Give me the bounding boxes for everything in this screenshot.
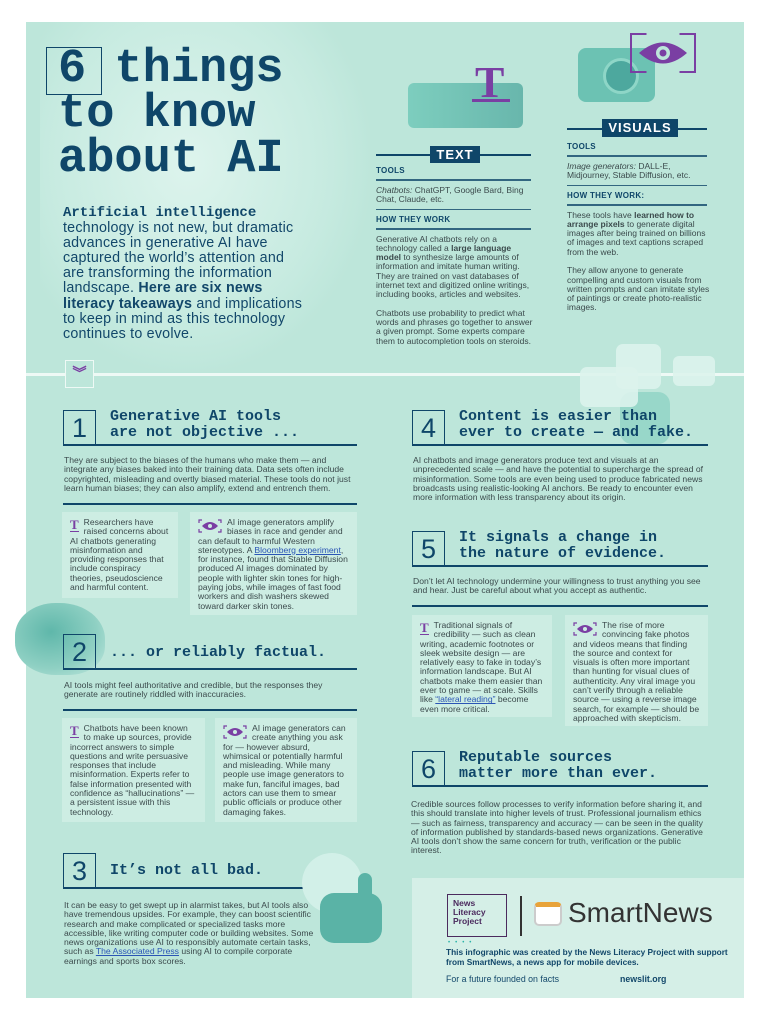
- panel: text tools: Chatbots use probability to predict what words and phrases go together to answer a given prompt. Some experts compare them to autocompletion tools on steroids.: [376, 308, 532, 346]
- section 2: ... or reliably factual.: [110, 644, 326, 661]
- panel: text tools: T: [475, 58, 504, 107]
- section 4: [412, 408, 708, 502]
- decorative head silhouette: [40, 22, 370, 372]
- footer: credits: ••••: [448, 940, 476, 946]
- logo: News Literacy Project: [447, 894, 507, 937]
- section 4: AI chatbots and image generators produce text and visuals at an unprecedented scale — and have the potential to supercharge the spread of misinformation. Some tools are even being used to produce fabricated news broadcasts using realistic-looking AI anchors. Be ready to encounter even more information with less transparency about its origin.: [413, 455, 703, 502]
- section 6: 6: [421, 754, 436, 784]
- section 4: Content is easier than: [459, 408, 657, 425]
- panel: visual tools: VISUALS: [608, 120, 672, 135]
- panel: text tools: TEXT: [436, 147, 474, 162]
- section 5: the nature of evidence.: [459, 545, 666, 562]
- label: TEXT: [376, 154, 531, 156]
- section 4: ever to create — and fake.: [459, 424, 693, 441]
- panel: visual tools: They allow anyone to generate compelling and custom visuals from written prompts and can imitate styles of paintings or create photo-realistic images.: [567, 265, 709, 312]
- intro text: Artificial intelligence technology is not new, but dramatic advances in generative AI have captured the world’s attention and are transforming the information landscape. Here are six news literacy takeaways and implications to keep in mind as this technology continues to evolve.: [63, 205, 302, 342]
- section 2: AI tools might feel authoritative and credible, but the responses they generate are routinely riddled with inaccuracies.: [64, 680, 322, 699]
- section 2: [62, 634, 357, 822]
- callout: credibility signals: T: [420, 620, 429, 635]
- section 5: [412, 529, 708, 726]
- footer: credits: SmartNews: [568, 897, 713, 928]
- title: to know: [58, 88, 255, 141]
- section 6: matter more than ever.: [459, 765, 657, 782]
- icon: chat bubbles and robot: [580, 344, 715, 444]
- callout: fakes: AI image generators can create anything you ask for — however absurd, whimsical or potentially harmful and misleading. While many people use image generators to make fun, fanciful images, bad actors can use them to smear public officials or produce other damaging fakes.: [223, 723, 346, 817]
- title: about AI: [58, 133, 284, 186]
- panel: text tools: TOOLS: [376, 166, 405, 175]
- title: 6 things: [58, 43, 284, 96]
- section 3: [63, 853, 313, 966]
- footer: credits: This infographic was created by the News Literacy Project with support from SmartNews, a news app for mobile devices.: [446, 947, 728, 966]
- section 5: It signals a change in: [459, 529, 657, 546]
- icon: thumbs up with smiley: [302, 853, 382, 943]
- footer: credits: For a future founded on facts: [446, 974, 559, 984]
- section 1: Generative AI tools: [110, 408, 281, 425]
- section 3: 3: [72, 856, 87, 886]
- divider between intro and sections: [26, 373, 744, 376]
- section 1: [62, 408, 357, 615]
- section 5: 5: [421, 534, 436, 564]
- section 6: Credible sources follow processes to verify information before sharing it, and this should translate into higher levels of trust. Professional journalism ethics — such as fairness, transparency and accuracy — can be seen in the quality of information published by standards-based news organizations. Generative AI tools don’t show the same concern for truth, verification or the public interest.: [411, 799, 703, 855]
- logo: News Literacy Project: Literacy: [453, 907, 486, 917]
- callout: credibility signals: Traditional signals of credibility — such as clean writing, academic footnotes or sleek website design — are relatively easy to fake in today’s information landscape. But AI chatbots make them easier than ever to game — at scale. Skills like “lateral reading” become even more critical.: [420, 620, 542, 714]
- panel: text tools: Generative AI chatbots rely on a technology called a large language model to synthesize large amounts of information and imitate human writing. They are trained on vast databases of internet text and digitized online writings, including books, articles and websites.: [376, 234, 529, 299]
- icon: scroll chevron: ︾: [72, 365, 86, 381]
- icon: brain: [15, 603, 105, 675]
- section 3: It can be easy to get swept up in alarmist takes, but AI tools also have tremendous upsides. For example, they can boost scientific research and make complicated or specialized tasks more accessible, like writing computer code or building websites. Some news organizations use AI to responsibly automate certain tasks, such as The Associated Press using AI to compile corporate earnings and sports box scores.: [64, 900, 313, 966]
- panel: visual tools: These tools have learned how to arrange pixels to generate digital images after being trained on billions of images and text captions scraped from the web.: [567, 210, 705, 257]
- callout: image bias: AI image generators amplify biases in race and gender and can default to harmful Western stereotypes. A Bloomberg experiment, for instance, found that Stable Diffusion produced AI images dominated by people with lighter skin tones for high-paying jobs, while images of fast food workers and dish washers skewed toward darker skin tones.: [198, 517, 348, 611]
- section 3: It’s not all bad.: [110, 862, 263, 879]
- logo: SmartNews: [534, 902, 562, 926]
- section 4: 4: [421, 413, 436, 443]
- footer: credits: newslit.org: [620, 974, 666, 984]
- label: VISUALS: [567, 128, 707, 130]
- icon: camera with eye: [578, 48, 655, 102]
- logo: News Literacy Project: Project: [453, 916, 482, 926]
- logo: News Literacy Project: News: [453, 898, 475, 908]
- title: [46, 43, 284, 186]
- callout: text bias: Researchers have raised concerns about AI chatbots generating misinformation and providing responses that include conspiracy theories, pseudoscience and harmful content.: [70, 517, 168, 592]
- panel: visual tools: HOW THEY WORK:: [567, 191, 644, 200]
- section 2: 2: [72, 637, 87, 667]
- section 1: 1: [72, 413, 87, 443]
- callout: hallucinations: Chatbots have been known to make up sources, provide incorrect answers to simple questions and write persuasive responses that include misinformation. Experts refer to false information presented with confidence as “hallucinations” — a persistent issue with this technology.: [70, 723, 194, 817]
- panel: visual tools: [567, 33, 709, 312]
- section 5: Don’t let AI technology undermine your willingness to trust anything you see and hear. Just be careful about what you accept as authentic.: [413, 576, 701, 595]
- icon: scroll chevron: [65, 360, 94, 388]
- panel: text tools: HOW THEY WORK: [376, 215, 450, 224]
- section 1: are not objective ...: [110, 424, 299, 441]
- section 1: They are subject to the biases of the humans who make them — and integrate any biases baked into their training data. Data sets often include copyrighted, misleading and overtly biased material. These tools do not just learn human biases; they can also amplify, extend and entrench them.: [64, 455, 350, 493]
- panel: text tools: Chatbots: ChatGPT, Google Bard, Bing Chat, Claude, etc.: [376, 184, 523, 204]
- callout: text bias: T: [70, 517, 79, 532]
- callout: hallucinations: T: [70, 723, 79, 738]
- panel: visual tools: TOOLS: [567, 142, 596, 151]
- icon: keyboard with T: [408, 83, 523, 128]
- callout: source and context: The rise of more convincing fake photos and videos means that finding the source and context for visuals is often more important than hunting for visual clues of authenticity. Any viral image you can’t verify through a reliable source — using a reverse image search, for example — should be approached with skepticism.: [573, 620, 699, 723]
- panel: text tools: [376, 58, 532, 346]
- panel: visual tools: Image generators: DALL-E, Midjourney, Stable Diffusion, etc.: [567, 160, 690, 180]
- section 6: [411, 749, 708, 855]
- footer: credits: [412, 878, 744, 998]
- section 6: Reputable sources: [459, 749, 612, 766]
